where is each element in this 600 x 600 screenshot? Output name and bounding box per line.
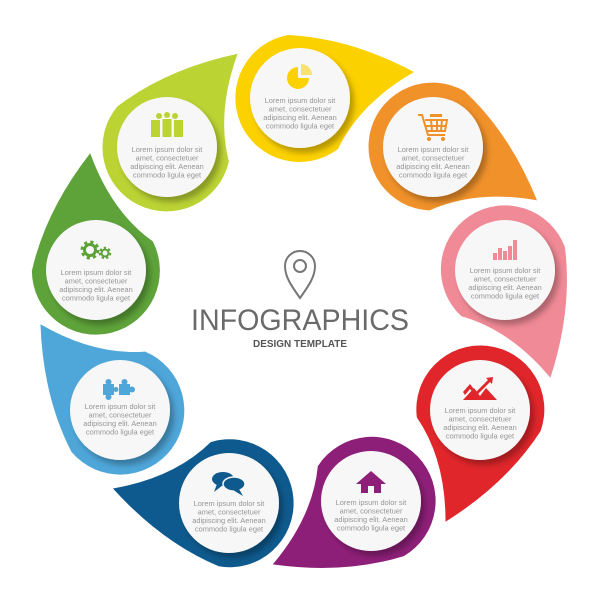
- shape: lime drop: [77, 25, 295, 238]
- icon: gears: [83, 243, 110, 258]
- item: pink: amet, consectetuer: [474, 274, 537, 284]
- item: light blue: commodo ligula eget: [86, 428, 154, 436]
- icon: people: [151, 112, 183, 137]
- item: dark blue: adipiscing elit. Aenean: [192, 516, 266, 525]
- item: red: adipiscing elit. Aenean: [443, 423, 517, 432]
- item: dark blue: [179, 453, 279, 553]
- item: red: amet, consectetuer: [449, 414, 512, 424]
- shape: pink drop: [431, 195, 587, 393]
- item: pink: adipiscing elit. Aenean: [468, 283, 542, 292]
- icon: house: [356, 471, 386, 493]
- item: light blue: Lorem ipsum dolor sit: [85, 402, 155, 411]
- item: lime: commodo ligula eget: [133, 170, 201, 180]
- item: orange: [383, 97, 483, 197]
- item: yellow: amet, consectetuer: [269, 104, 332, 114]
- icon: bar chart: [493, 240, 517, 260]
- title: INFOGRAPHICS: [191, 304, 409, 337]
- item: purple: [321, 451, 421, 551]
- shape: green drop: [23, 147, 179, 345]
- icon: cart: [418, 115, 447, 135]
- item: lime: adipiscing elit. Aenean: [130, 162, 204, 171]
- item: green: adipiscing elit. Aenean: [59, 285, 133, 294]
- shape: purple drop: [242, 419, 453, 599]
- icon: area chart with arrow: [463, 377, 497, 400]
- item: orange: adipiscing elit. Aenean: [396, 162, 470, 171]
- item: orange: amet, consectetuer: [402, 154, 465, 162]
- item: red: commodo ligula eget: [446, 432, 514, 440]
- item: light blue: adipiscing elit. Aenean: [83, 419, 157, 428]
- item: lime: amet, consectetuer: [136, 154, 199, 162]
- shape: orange drop: [342, 57, 561, 269]
- item: yellow: commodo ligula eget: [266, 122, 334, 130]
- icon: location pin: [285, 251, 315, 298]
- item: pink: Lorem ipsum dolor sit: [470, 266, 540, 275]
- item: dark blue: Lorem ipsum dolor sit: [194, 499, 264, 508]
- item: purple: amet, consectetuer: [340, 506, 403, 516]
- item: orange: commodo ligula eget: [399, 170, 467, 180]
- subtitle: DESIGN TEMPLATE: [253, 339, 347, 350]
- item: purple: adipiscing elit. Aenean: [334, 515, 408, 524]
- item: orange: Lorem ipsum dolor sit: [398, 145, 468, 154]
- item: light blue: amet, consectetuer: [89, 410, 152, 420]
- item: yellow: Lorem ipsum dolor sit: [265, 96, 335, 105]
- icon: puzzle: [103, 379, 135, 400]
- item: dark blue: amet, consectetuer: [198, 508, 261, 516]
- shape: light blue drop: [8, 279, 208, 497]
- item: green: Lorem ipsum dolor sit: [61, 268, 131, 277]
- icon: speech bubbles: [212, 472, 245, 496]
- item: lime: [117, 97, 217, 197]
- item: red: Lorem ipsum dolor sit: [445, 406, 515, 415]
- item: purple: commodo ligula eget: [337, 524, 405, 532]
- item: yellow: adipiscing elit. Aenean: [263, 113, 337, 122]
- item: green: amet, consectetuer: [65, 276, 128, 286]
- shape: red drop: [368, 322, 567, 540]
- item: purple: Lorem ipsum dolor sit: [336, 498, 406, 507]
- item: green: [46, 220, 146, 320]
- item: yellow: [250, 48, 350, 148]
- shape: yellow drop: [235, 35, 414, 162]
- item: lime: Lorem ipsum dolor sit: [132, 145, 202, 154]
- item: dark blue: commodo ligula eget: [195, 524, 263, 534]
- item: pink: [455, 220, 555, 320]
- item: red: [430, 360, 530, 460]
- shape: dark blue drop: [100, 404, 312, 584]
- item: green: commodo ligula eget: [62, 294, 130, 302]
- item: light blue: [70, 360, 170, 460]
- item: pink: commodo ligula eget: [471, 292, 539, 300]
- icon: pie chart: [287, 64, 312, 89]
